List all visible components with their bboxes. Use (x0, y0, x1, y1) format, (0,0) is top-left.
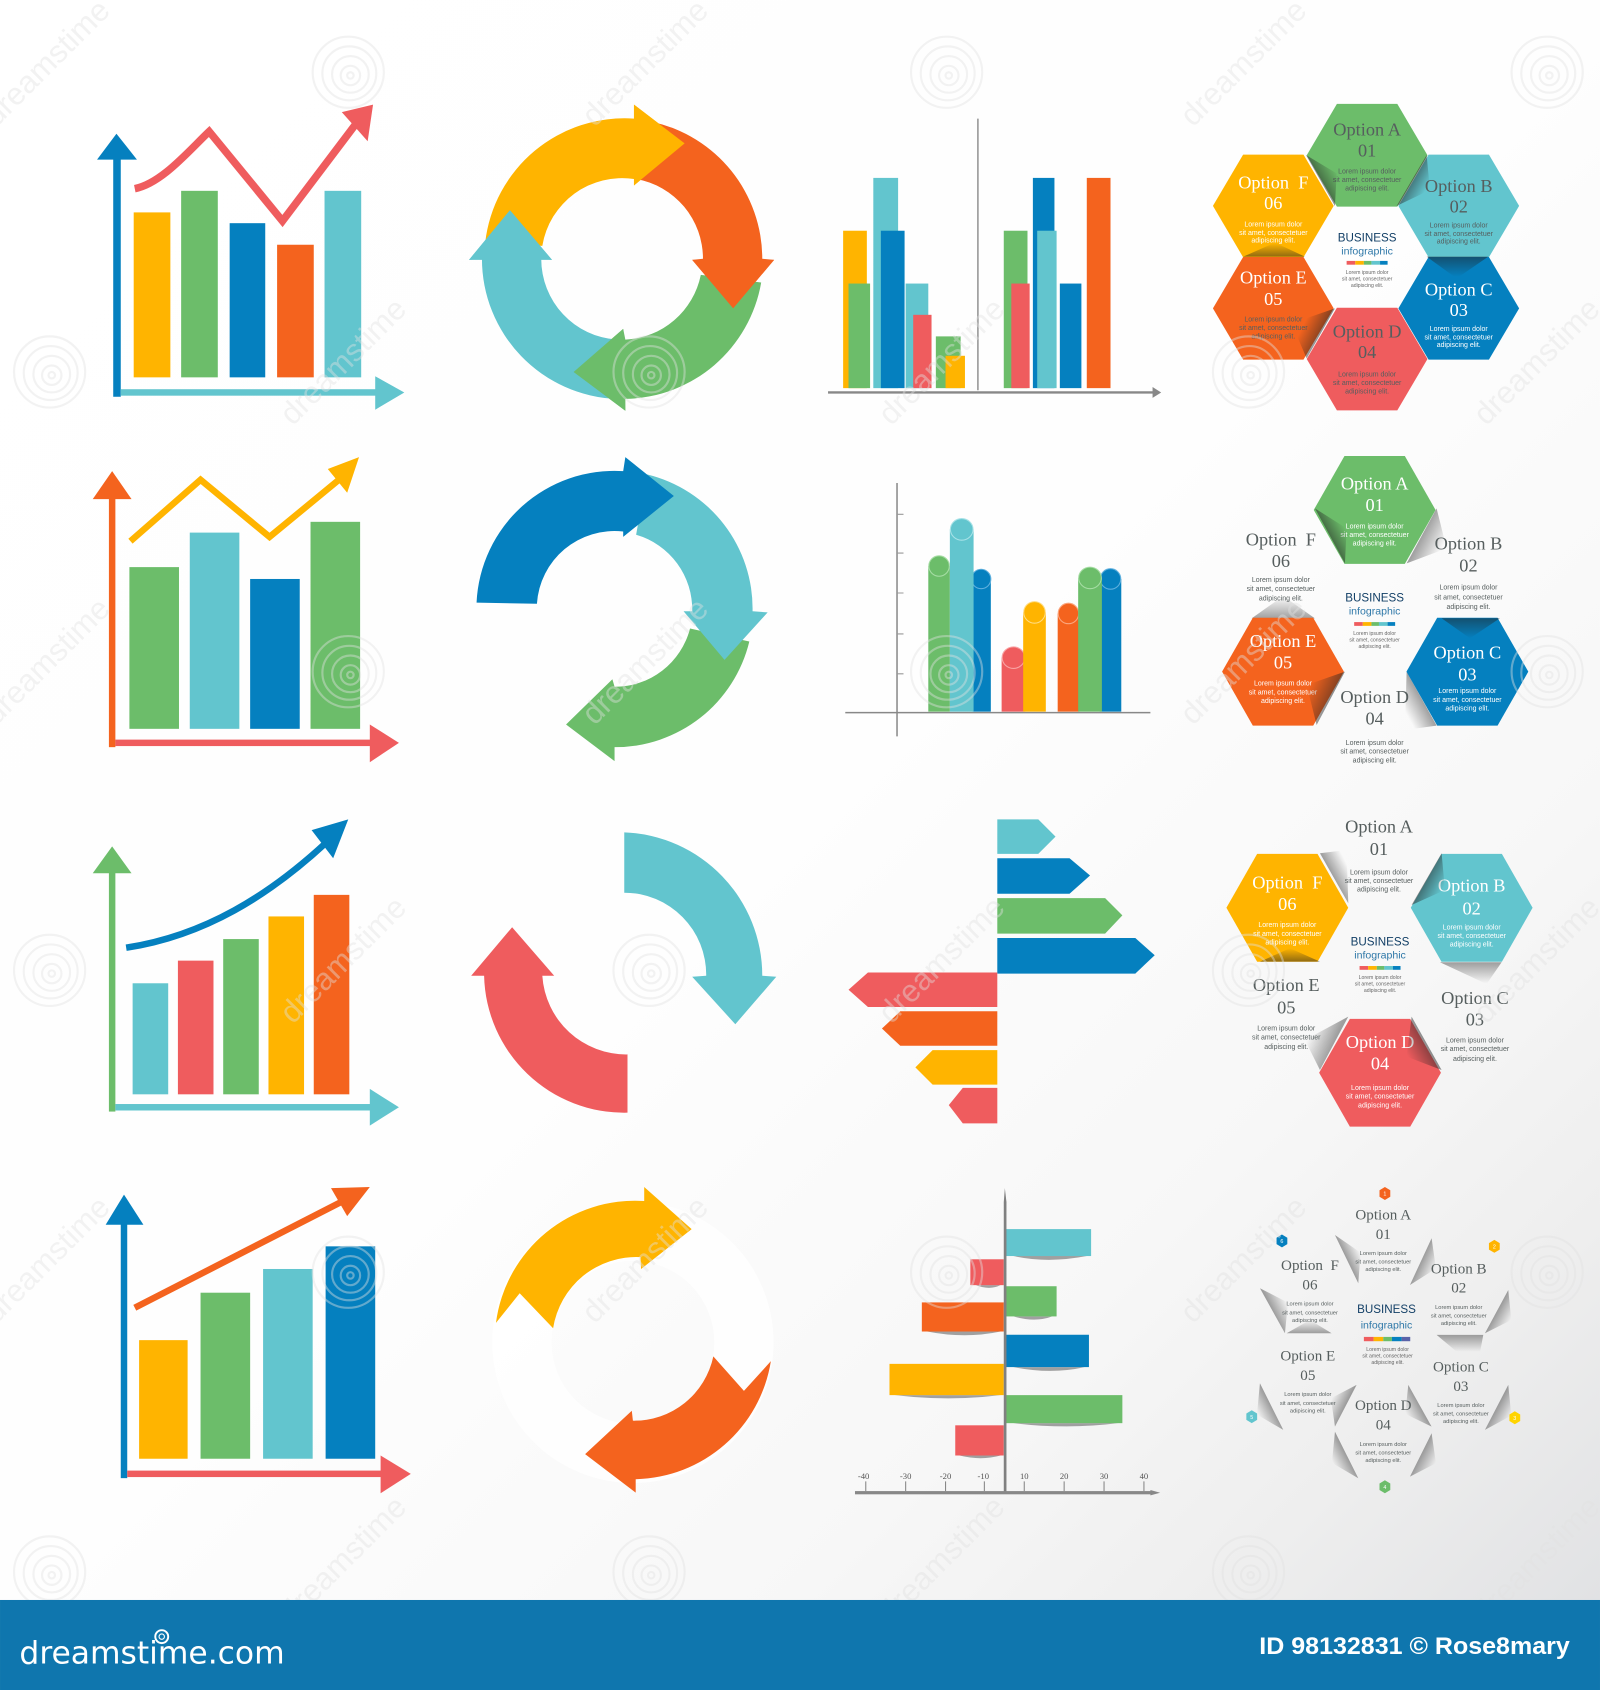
centre text: BUSINESS (1357, 1303, 1416, 1316)
bar chart row 4 with straight trend arrow (106, 1187, 411, 1493)
centre text: infographic (1349, 606, 1400, 618)
watermark spirals and text: dreamstime (871, 1489, 1011, 1629)
hex C: 03 (1450, 300, 1468, 320)
watermark spirals and text: dreamstime (1173, 1189, 1313, 1329)
hex A: Lorem ipsum dolor (1338, 169, 1397, 176)
hex D (1319, 1019, 1441, 1127)
hex B: sit amet, consectetuer (1437, 933, 1507, 940)
hex D: Lorem ipsum dolor (1351, 1085, 1410, 1092)
option E text: Option E (1253, 975, 1320, 995)
centre text: Lorem ipsum dolor (1359, 975, 1402, 981)
outer cast shadows (1252, 508, 1447, 618)
hexagon infographic row 2 (1222, 456, 1528, 764)
option E text: sit amet, consectetuer (1252, 1034, 1321, 1041)
circular arrows row 1 (469, 105, 774, 411)
circular arrows row 3 (471, 832, 776, 1113)
centre text: sit amet, consectetuer (1342, 276, 1393, 282)
hex C: Option C (1425, 279, 1493, 299)
option F text: 06 (1302, 1277, 1318, 1293)
small number badges: 1 (1383, 1192, 1386, 1198)
centre text: infographic (1341, 245, 1393, 257)
option D text: Option D (1355, 1398, 1412, 1414)
option D text: sit amet, consectetuer (1355, 1450, 1411, 1456)
hex B: Option B (1425, 176, 1493, 196)
hex F (1213, 155, 1334, 257)
centre text (1338, 232, 1397, 289)
hex F: Option F (1238, 173, 1308, 193)
option E text: Lorem ipsum dolor (1257, 1026, 1316, 1033)
option E text (1280, 1349, 1336, 1414)
hex B (1411, 854, 1533, 962)
hex C: Lorem ipsum dolor (1438, 688, 1497, 695)
option D text: Option D (1340, 687, 1409, 707)
hex F: Lorem ipsum dolor (1244, 221, 1303, 228)
hex A: Option A (1333, 119, 1402, 139)
option C text: Lorem ipsum dolor (1446, 1038, 1505, 1045)
option C text: adipiscing elit. (1443, 1419, 1479, 1425)
hex C: adipiscing elit. (1445, 706, 1489, 713)
option C text (1441, 988, 1510, 1063)
hex E: adipiscing elit. (1261, 698, 1305, 705)
option A text: sit amet, consectetuer (1355, 1260, 1411, 1266)
hex A: Lorem ipsum dolor (1346, 523, 1404, 530)
option F text: sit amet, consectetuer (1282, 1310, 1338, 1316)
watermark spirals and text: dreamstime (273, 890, 413, 1030)
hex B: 02 (1450, 196, 1468, 216)
hex F: 06 (1264, 193, 1282, 213)
option C text: 03 (1453, 1379, 1468, 1395)
option A text: 01 (1376, 1227, 1391, 1243)
hex D: Option D (1346, 1032, 1414, 1052)
hex A: adipiscing elit. (1353, 541, 1397, 548)
hex shadows (1243, 155, 1488, 358)
hex A (1314, 456, 1436, 564)
option E text: 05 (1300, 1368, 1315, 1384)
hex B: sit amet, consectetuer (1425, 231, 1494, 238)
axis tick labels: -40 (858, 1471, 869, 1481)
option E text: Option E (1280, 1349, 1335, 1365)
bar chart row 2 with zigzag line (93, 457, 399, 762)
arrow bar chart row 3 (849, 819, 1155, 1123)
option F text: adipiscing elit. (1259, 596, 1303, 603)
option C text: sit amet, consectetuer (1433, 1412, 1489, 1418)
option D text: adipiscing elit. (1365, 1458, 1402, 1464)
option F text: Option F (1281, 1258, 1339, 1274)
centre text: infographic (1361, 1319, 1412, 1331)
option F text (1281, 1258, 1339, 1324)
centre text: BUSINESS (1338, 232, 1397, 245)
option D text: Lorem ipsum dolor (1360, 1442, 1407, 1448)
option A text (1355, 1207, 1411, 1273)
bar chart row 3 with rising curve (93, 819, 399, 1126)
option D text: sit amet, consectetuer (1340, 749, 1410, 756)
small number badges: 2 (1493, 1244, 1496, 1250)
centre text: adipiscing elit. (1364, 988, 1396, 994)
option A text: adipiscing elit. (1357, 887, 1401, 894)
cast shadow left of hex C (1405, 672, 1437, 730)
option F text: Lorem ipsum dolor (1252, 577, 1311, 584)
centre text: sit amet, consectetuer (1362, 1353, 1413, 1359)
axis tick labels: 30 (1100, 1471, 1108, 1481)
option B text (1434, 533, 1503, 611)
axis tick labels: -10 (978, 1471, 989, 1481)
hex A: sit amet, consectetuer (1333, 177, 1402, 184)
option A text (1345, 816, 1414, 894)
hex F: sit amet, consectetuer (1253, 931, 1322, 938)
hex C: sit amet, consectetuer (1433, 697, 1502, 704)
centre text: infographic (1354, 949, 1406, 961)
hex E: sit amet, consectetuer (1249, 689, 1318, 696)
hex A: sit amet, consectetuer (1340, 532, 1410, 539)
hex F (1226, 854, 1348, 962)
hex F: 06 (1278, 894, 1296, 914)
centre text (1351, 936, 1410, 994)
circular arrows row 4 (496, 1187, 771, 1493)
option B text (1431, 1261, 1487, 1327)
option F text: adipiscing elit. (1292, 1318, 1328, 1324)
centre text: sit amet, consectetuer (1349, 637, 1400, 643)
hex A: 01 (1358, 140, 1376, 160)
option E text: Lorem ipsum dolor (1284, 1392, 1332, 1398)
option C text (1433, 1359, 1489, 1425)
hex B: 02 (1463, 898, 1481, 918)
hex C: sit amet, consectetuer (1425, 335, 1494, 342)
small number badges: 3 (1513, 1416, 1516, 1422)
axis tick labels: -30 (900, 1471, 911, 1481)
option D text: 04 (1365, 709, 1384, 729)
option D text (1340, 687, 1410, 764)
hex F: sit amet, consectetuer (1239, 230, 1308, 237)
small number badges (1246, 1187, 1520, 1493)
centre text: BUSINESS (1345, 592, 1404, 605)
footer bar (0, 1600, 1600, 1690)
footer logo: dreamstime.com (19, 1636, 285, 1672)
hex C: Option C (1434, 643, 1501, 663)
hexagon infographic row 1 (1213, 104, 1519, 410)
centre text: Lorem ipsum dolor (1346, 270, 1389, 276)
axis tick labels: -20 (940, 1471, 951, 1481)
hex E: sit amet, consectetuer (1239, 325, 1308, 332)
hex F: adipiscing elit. (1251, 238, 1295, 245)
option C text: Option C (1433, 1359, 1489, 1375)
option B text: sit amet, consectetuer (1434, 594, 1503, 601)
option C text: Option C (1441, 988, 1509, 1008)
option B text: adipiscing elit. (1441, 1321, 1477, 1327)
option B text: 02 (1451, 1281, 1466, 1297)
hex D: sit amet, consectetuer (1346, 1094, 1415, 1101)
option A text: Lorem ipsum dolor (1350, 869, 1409, 876)
hex A: Option A (1341, 473, 1409, 493)
watermark spirals and text: dreamstime (1173, 591, 1313, 731)
small number badges: 5 (1250, 1415, 1253, 1421)
hexagon infographic row 4 (1246, 1187, 1520, 1493)
option C text: Lorem ipsum dolor (1437, 1403, 1485, 1409)
hex D: sit amet, consectetuer (1333, 380, 1402, 387)
hex F: adipiscing elit. (1265, 939, 1309, 946)
inner shadows on hex E and C (1307, 618, 1500, 725)
hex E: 05 (1264, 289, 1282, 309)
hex D (1307, 308, 1427, 410)
centre text (1345, 592, 1404, 650)
option E text (1252, 975, 1321, 1051)
hex E: adipiscing elit. (1251, 334, 1295, 341)
option F text: Option F (1246, 530, 1316, 550)
option B text: adipiscing elit. (1446, 604, 1490, 611)
hexagon infographic row 3 (1226, 816, 1533, 1127)
option A text: Lorem ipsum dolor (1360, 1251, 1407, 1257)
hex C: adipiscing elit. (1437, 342, 1481, 349)
watermark spirals and text: dreamstime (273, 1489, 413, 1629)
watermark spirals and text: dreamstime (575, 1189, 715, 1329)
option F text (1246, 530, 1316, 603)
hex D: Option D (1333, 321, 1401, 341)
hex D: adipiscing elit. (1345, 389, 1389, 396)
option E text: adipiscing elit. (1264, 1044, 1308, 1051)
hex A: 01 (1365, 495, 1384, 515)
centre text: BUSINESS (1351, 936, 1410, 949)
hex F: Lorem ipsum dolor (1258, 922, 1317, 929)
hex B: Option B (1438, 876, 1506, 896)
option E text: sit amet, consectetuer (1280, 1401, 1336, 1407)
hex E: Option E (1250, 631, 1316, 651)
hex D: 04 (1371, 1054, 1389, 1074)
watermark spirals and text: dreamstime (575, 591, 715, 731)
option D text: adipiscing elit. (1353, 757, 1397, 764)
bar chart row 1 with zigzag line (97, 105, 404, 410)
circular arrows row 2 (477, 457, 768, 761)
option C text: 03 (1466, 1009, 1484, 1029)
hex E: Lorem ipsum dolor (1244, 316, 1303, 323)
centre text: adipiscing elit. (1351, 283, 1383, 289)
hex C: Lorem ipsum dolor (1430, 326, 1488, 333)
option F text: 06 (1272, 551, 1290, 571)
option B text: 02 (1459, 555, 1478, 575)
option E text: adipiscing elit. (1290, 1408, 1326, 1414)
option D text (1355, 1398, 1412, 1464)
centre text: Lorem ipsum dolor (1366, 1347, 1409, 1353)
small number badges: 4 (1383, 1485, 1386, 1491)
option B text: Lorem ipsum dolor (1439, 585, 1498, 592)
centre text: sit amet, consectetuer (1355, 981, 1406, 987)
axis tick labels: 20 (1060, 1471, 1068, 1481)
column chart row 1 (828, 119, 1161, 398)
hex E: 05 (1274, 652, 1292, 672)
watermark spirals and text: dreamstime (273, 291, 413, 431)
option E text: 05 (1277, 997, 1295, 1017)
hex D: Lorem ipsum dolor (1338, 371, 1397, 378)
option A text: 01 (1370, 839, 1388, 859)
option A text: adipiscing elit. (1365, 1267, 1402, 1273)
option D text: 04 (1376, 1418, 1391, 1434)
watermark spirals and text: dreamstime (871, 291, 1011, 431)
hex A (1307, 104, 1427, 207)
option B text: Option B (1435, 533, 1502, 553)
hex E: Lorem ipsum dolor (1254, 681, 1313, 688)
hex F: Option F (1252, 872, 1322, 892)
centre text: adipiscing elit. (1358, 644, 1391, 650)
cylinder chart row 2 (845, 483, 1150, 736)
option A text: sit amet, consectetuer (1345, 878, 1414, 885)
centre text: adipiscing elit. (1371, 1360, 1404, 1366)
option C text: adipiscing elit. (1453, 1056, 1497, 1063)
inner hex shadows (1260, 853, 1445, 1070)
centre text: Lorem ipsum dolor (1353, 631, 1396, 637)
diverging bar chart row 4 (855, 1188, 1160, 1495)
option D text: Lorem ipsum dolor (1346, 740, 1404, 747)
hex A: adipiscing elit. (1345, 185, 1389, 192)
option C text: sit amet, consectetuer (1441, 1046, 1510, 1053)
hex C: 03 (1458, 664, 1477, 684)
axis tick labels: 40 (1140, 1471, 1148, 1481)
option F text: sit amet, consectetuer (1247, 586, 1316, 593)
hex A inner shadow (1315, 508, 1347, 563)
hex B (1398, 155, 1519, 257)
axis tick labels: 10 (1020, 1471, 1029, 1481)
option A text: Option A (1345, 816, 1414, 836)
image id credit: ID 98132831 © Rose8mary (1259, 1634, 1571, 1660)
axis tick labels (858, 1471, 1148, 1481)
hex D: adipiscing elit. (1358, 1102, 1402, 1109)
hex B: adipiscing elit. (1437, 239, 1481, 246)
option B text: sit amet, consectetuer (1431, 1313, 1487, 1319)
outer cast shadows (1305, 850, 1502, 1070)
hex C (1406, 618, 1528, 726)
hex C (1398, 257, 1519, 360)
small number badges: 6 (1280, 1239, 1283, 1245)
hex B: Lorem ipsum dolor (1430, 222, 1488, 229)
option B text: Option B (1431, 1261, 1487, 1277)
paper fold shadows (1257, 1235, 1511, 1478)
hex B: Lorem ipsum dolor (1443, 924, 1501, 931)
watermark spirals and text: dreamstime (871, 890, 1011, 1030)
option F text: Lorem ipsum dolor (1286, 1302, 1334, 1308)
hex E (1222, 618, 1344, 726)
hex E (1213, 257, 1334, 360)
hex D: 04 (1358, 342, 1376, 362)
option A text: Option A (1355, 1207, 1411, 1223)
hex B: adipiscing elit. (1450, 942, 1494, 949)
centre text (1357, 1303, 1416, 1366)
hex E: Option E (1240, 268, 1307, 288)
option B text: Lorem ipsum dolor (1435, 1305, 1482, 1311)
